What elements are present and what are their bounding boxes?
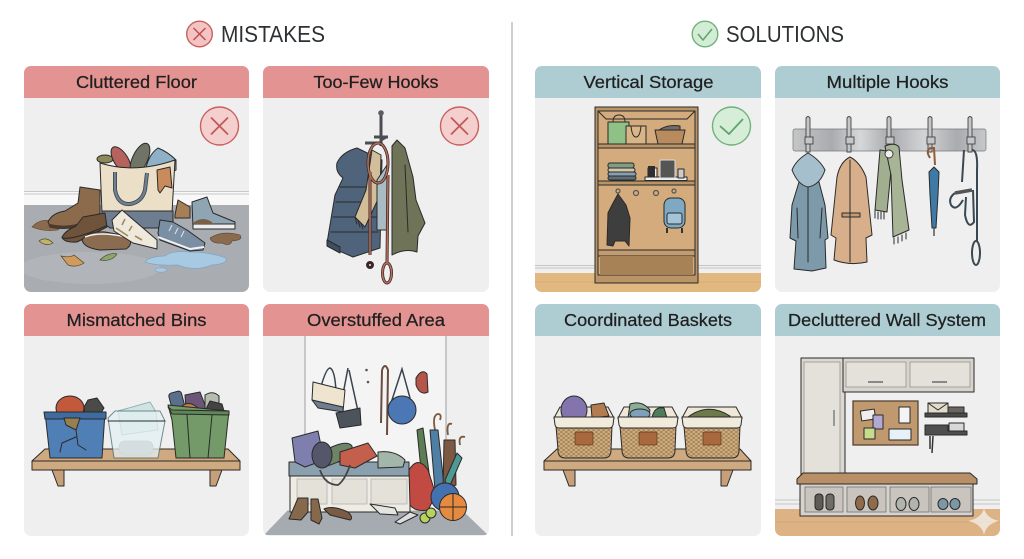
header: overstuffed area: Overstuffed Area — [307, 310, 445, 330]
illustration: three mismatched bins on shelf — [32, 390, 240, 486]
icon: red cross badge — [187, 21, 212, 47]
panel: vertical storage — [535, 66, 761, 292]
scarf — [355, 150, 381, 227]
header: mismatched bins: Mismatched Bins — [66, 310, 207, 330]
upper cabinets — [843, 358, 974, 392]
corkboard — [853, 401, 918, 445]
puddle — [145, 252, 226, 268]
heading: mistakes: MISTAKES — [221, 21, 325, 47]
small hooks — [616, 189, 676, 196]
piled bags on bench — [292, 431, 405, 485]
illustration: matching baskets on shelf — [544, 396, 751, 486]
green bin — [168, 390, 229, 458]
header: vertical storage — [535, 66, 761, 98]
header: mismatched bins — [24, 304, 249, 336]
header: overstuffed area — [263, 304, 489, 336]
grey-blue boot — [192, 197, 235, 229]
illustration: bookcase with shelves and hooks — [535, 107, 761, 292]
wall bags — [312, 366, 428, 435]
header: coordinated baskets — [535, 304, 761, 336]
tablet and tray — [645, 160, 687, 180]
white sneaker — [112, 210, 157, 249]
header: multiple hooks — [775, 66, 1000, 98]
panel: cluttered floor — [20, 66, 249, 292]
illustration: shoes, bag and mud on floor — [20, 140, 249, 292]
panel: coordinated baskets — [535, 304, 761, 536]
blue coat — [790, 182, 828, 271]
icon: sparkle watermark — [968, 508, 999, 535]
icon: green check badge — [692, 21, 718, 47]
mud — [32, 220, 241, 245]
leash — [368, 143, 392, 283]
brown shoe — [62, 213, 107, 242]
blue jacket — [327, 148, 382, 257]
heading: mistakes — [187, 21, 325, 47]
illustration: hook rail with hanging items — [790, 116, 986, 271]
umbrellas and backpack — [409, 414, 466, 523]
bag contents — [96, 142, 176, 172]
hanging jacket — [607, 194, 630, 246]
icon: cross badge — [200, 107, 238, 145]
icon: cross badge — [440, 107, 478, 145]
shoe cubbies — [800, 484, 973, 516]
key rack — [925, 423, 967, 453]
green coat — [392, 140, 425, 255]
baskets — [554, 417, 742, 458]
clear bin — [108, 402, 165, 458]
panel: multiple hooks — [775, 66, 1000, 292]
brown boot — [48, 187, 100, 229]
tall cabinet — [801, 358, 845, 476]
panel: too-few hooks — [263, 66, 489, 292]
heading: solutions: SOLUTIONS — [726, 21, 844, 47]
header: too-few hooks: Too-Few Hooks — [314, 72, 439, 92]
panel: mismatched bins — [24, 304, 249, 536]
header: multiple hooks: Multiple Hooks — [826, 72, 949, 92]
hooks — [805, 116, 975, 152]
recycling bag and paper bag — [608, 115, 646, 144]
header: decluttered wall system: Decluttered Wall System — [788, 310, 986, 330]
wooden shelf — [32, 449, 240, 486]
floor — [264, 511, 488, 535]
panel: decluttered wall system — [775, 304, 1000, 536]
illustration: crowded bench and wall — [264, 336, 488, 535]
bookcase — [595, 107, 698, 283]
wooden shelf — [544, 449, 751, 486]
floor shoes — [289, 498, 418, 524]
icon: check badge — [712, 107, 750, 145]
sole-up shoe — [82, 232, 131, 250]
header: vertical storage: Vertical Storage — [584, 72, 714, 92]
header: coordinated baskets: Coordinated Baskets — [564, 310, 732, 330]
blue sneaker — [158, 220, 205, 251]
illustration: mudroom wall unit — [775, 358, 1000, 536]
metal rail — [793, 129, 986, 151]
tan coat — [831, 157, 872, 264]
umbrella — [928, 148, 939, 236]
blue cracked bin — [44, 396, 106, 458]
basket contents — [561, 396, 730, 424]
basket backs — [554, 407, 742, 418]
header: decluttered wall system — [775, 304, 1000, 336]
blue coat hood — [792, 153, 825, 187]
bench — [289, 462, 410, 512]
woven basket — [655, 130, 685, 144]
teal backpack — [664, 198, 685, 233]
green scarf — [875, 150, 893, 212]
back boot — [175, 200, 190, 218]
mail shelf — [925, 403, 967, 417]
illustration: overloaded single hook — [327, 110, 425, 283]
bench top — [797, 473, 977, 484]
leaves — [39, 239, 117, 266]
leash and harness — [950, 150, 980, 265]
tote bag — [100, 160, 175, 228]
header: too-few hooks — [263, 66, 489, 98]
panel: overstuffed area — [263, 304, 489, 536]
header: cluttered floor: Cluttered Floor — [76, 72, 197, 92]
divider — [511, 22, 513, 536]
folded clothes — [608, 163, 636, 180]
header: cluttered floor — [24, 66, 249, 98]
